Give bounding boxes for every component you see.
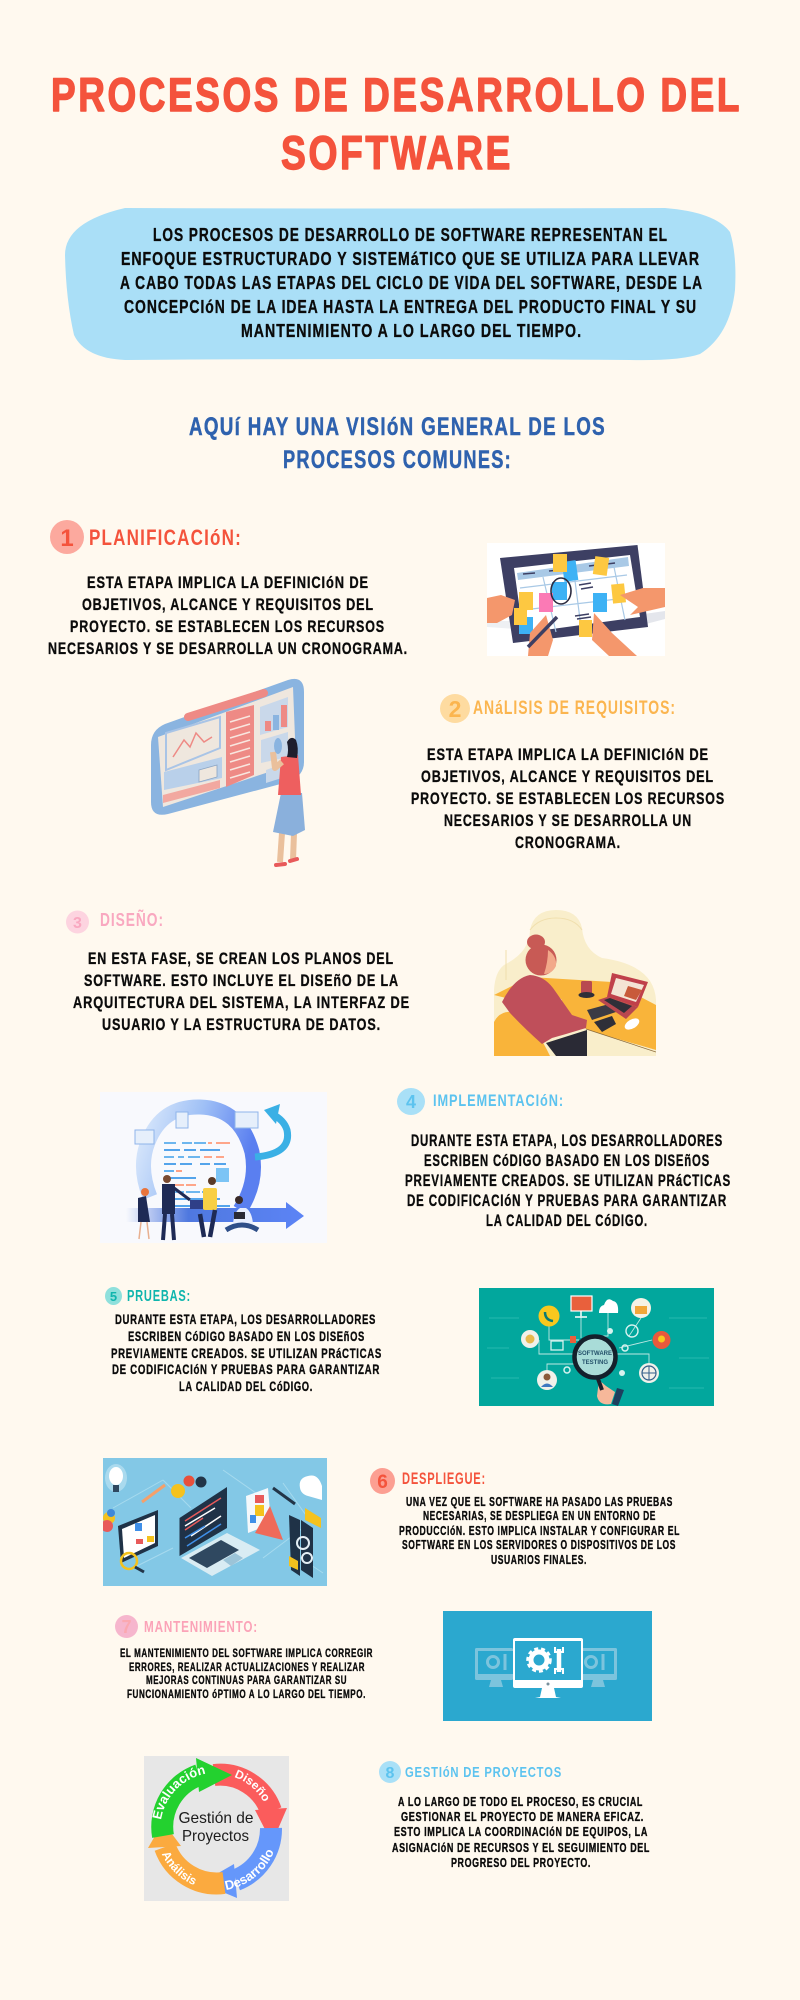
heading: diseño: DISEÑO:: [100, 909, 164, 930]
panel: step 2 análisis de requisitos: [151, 679, 725, 865]
text: despliegue: NECESARIAS, SE DESPLIEGA EN UN ENTORNO DE: [423, 1509, 656, 1523]
text: mantenimiento: MEJORAS CONTINUAS PARA GARANTIZAR SU: [146, 1675, 347, 1687]
text: pruebas: [111, 1311, 382, 1394]
heading: pruebas: PRUEBAS:: [127, 1288, 191, 1305]
text: mantenimiento: EL MANTENIMIENTO DEL SOFTWARE IMPLICA CORREGIR: [120, 1648, 373, 1660]
illustration: laptop and devices: [103, 1458, 327, 1586]
text: diseño: [73, 949, 410, 1034]
badge 8: [379, 1761, 401, 1783]
illustration: team in development cycle: [100, 1092, 327, 1243]
heading: análisis de requisitos: ANáLISIS DE REQUISITOS:: [473, 698, 676, 719]
subheading: AQUí HAY UNA VISIóN GENERAL DE LOS: [189, 413, 606, 441]
badge 2: [440, 694, 470, 723]
text: mantenimiento: [120, 1648, 373, 1701]
panel: introduction: [65, 208, 735, 360]
text: gestión de proyectos: ESTO IMPLICA LA COORDINACIóN DE EQUIPOS, LA: [394, 1825, 648, 1839]
illustration: monitors with gear and wrench: [443, 1611, 652, 1721]
subheading: PROCESOS COMUNES:: [283, 446, 512, 474]
text: gestión de proyectos: ASIGNACIóN DE RECURSOS Y EL SEGUIMIENTO DEL: [392, 1841, 650, 1855]
panel: introduction: MANTENIMIENTO A LO LARGO DEL TIEMPO.: [241, 321, 582, 341]
text: despliegue: [399, 1495, 680, 1567]
title: [51, 68, 742, 179]
title: SOFTWARE: [281, 126, 513, 179]
text: diseño: EN ESTA FASE, SE CREAN LOS PLANOS DEL: [88, 949, 394, 968]
text: diseño: SOFTWARE. ESTO INCLUYE EL DISEñO DE LA: [84, 971, 399, 990]
illustration: software testing: TESTING: [582, 1360, 608, 1366]
text: análisis: ESTA ETAPA IMPLICA LA DEFINICIóN DE: [427, 745, 709, 764]
badge 3: [66, 910, 89, 934]
text: análisis: CRONOGRAMA.: [515, 833, 621, 852]
badge 1: 1: [60, 525, 74, 552]
panel: step 7 mantenimiento: [115, 1611, 652, 1721]
panel: step 8 gestión de proyectos: [144, 1756, 650, 1901]
panel: step 1 planificación: [48, 520, 665, 658]
text: implementación: [405, 1131, 731, 1230]
text: planificación: NECESARIOS Y SE DESARROLLA UN CRONOGRAMA.: [48, 639, 408, 658]
panel: step 5 pruebas: [105, 1287, 714, 1406]
heading: planificación: PLANIFICACIóN:: [89, 525, 242, 550]
badge 7: [115, 1615, 138, 1638]
text: diseño: ARQUITECTURA DEL SISTEMA, LA INTERFAZ DE: [73, 993, 410, 1012]
text: despliegue: USUARIOS FINALES.: [491, 1553, 587, 1567]
badge 3: 3: [73, 915, 82, 932]
badge 2: 2: [449, 696, 461, 722]
illustration: woman at dashboard board: [151, 679, 305, 865]
heading: despliegue: DESPLIEGUE:: [402, 1469, 486, 1488]
text: diseño: USUARIO Y LA ESTRUCTURA DE DATOS.: [102, 1015, 381, 1034]
illustration: project management cycle: Desarrollo: [224, 1850, 273, 1890]
text: mantenimiento: FUNCIONAMIENTO óPTIMO A LO LARGO DEL TIEMPO.: [127, 1689, 366, 1701]
panel: step 6 despliegue: [101, 1458, 680, 1586]
illustration: software testing: SOFTWARE: [578, 1351, 612, 1357]
badge 4: 4: [406, 1092, 416, 1112]
illustration: project management cycle: [144, 1756, 289, 1901]
text: planificación: OBJETIVOS, ALCANCE Y REQUISITOS DEL: [82, 595, 374, 614]
text: planificación: ESTA ETAPA IMPLICA LA DEFINICIóN DE: [87, 573, 369, 592]
text: pruebas: DE CODIFICACIóN Y PRUEBAS PARA GARANTIZAR: [112, 1361, 380, 1377]
text: planificación: PROYECTO. SE ESTABLECEN LOS RECURSOS: [70, 617, 385, 636]
panel: step 4 implementación: [100, 1088, 731, 1243]
text: pruebas: PREVIAMENTE CREADOS. SE UTILIZAN PRáCTICAS: [111, 1345, 382, 1361]
badge 4: [397, 1088, 425, 1115]
badge 1: [50, 520, 84, 554]
text: gestión de proyectos: GESTIONAR EL PROYECTO DE MANERA EFICAZ.: [401, 1810, 644, 1824]
illustration: designer at desk: [494, 910, 656, 1056]
illustration: project management cycle: Evaluación: [152, 1767, 206, 1820]
text: pruebas: LA CALIDAD DEL CóDIGO.: [179, 1378, 313, 1394]
text: despliegue: UNA VEZ QUE EL SOFTWARE HA PASADO LAS PRUEBAS: [406, 1495, 673, 1509]
text: gestión de proyectos: A LO LARGO DE TODO EL PROCESO, ES CRUCIAL: [398, 1795, 643, 1809]
panel: step 3 diseño: [66, 909, 656, 1056]
subheading: [189, 413, 606, 474]
badge 6: 6: [377, 1472, 388, 1493]
badge 6: [370, 1468, 395, 1494]
badge 7: 7: [121, 1617, 132, 1637]
badge 5: 5: [110, 1289, 117, 1304]
illustration: project management cycle: Gestión de: [178, 1810, 254, 1827]
text: planificación: [48, 573, 408, 658]
badge 8: 8: [386, 1765, 395, 1782]
text: implementación: LA CALIDAD DEL CóDIGO.: [486, 1211, 648, 1230]
illustration: project management cycle: Diseño: [234, 1770, 268, 1801]
text: pruebas: DURANTE ESTA ETAPA, LOS DESARROLLADORES: [115, 1311, 376, 1327]
text: gestión de proyectos: PROGRESO DEL PROYECTO.: [451, 1856, 591, 1870]
text: despliegue: SOFTWARE EN LOS SERVIDORES O DISPOSITIVOS DE LOS: [402, 1538, 676, 1552]
heading: implementación: IMPLEMENTACIóN:: [433, 1091, 564, 1110]
illustration: software testing: [479, 1288, 714, 1406]
text: gestión de proyectos: [392, 1795, 650, 1870]
heading: gestión de proyectos: GESTIóN DE PROYECTOS: [405, 1764, 562, 1781]
text: despliegue: PRODUCCIóN. ESTO IMPLICA INSTALAR Y CONFIGURAR EL: [399, 1524, 680, 1538]
illustration: project management cycle: Análisis: [162, 1852, 196, 1884]
badge 5: [105, 1287, 122, 1305]
text: análisis: NECESARIOS Y SE DESARROLLA UN: [444, 811, 692, 830]
heading: mantenimiento: MANTENIMIENTO:: [144, 1619, 258, 1636]
illustration: project management cycle: Proyectos: [182, 1828, 249, 1845]
text: análisis: [411, 745, 725, 852]
text: mantenimiento: ERRORES, REALIZAR ACTUALIZACIONES Y REALIZAR: [129, 1662, 365, 1674]
illustration: tablet with sticky notes: [487, 543, 665, 656]
text: pruebas: ESCRIBEN CóDIGO BASADO EN LOS DISEñOS: [128, 1328, 365, 1344]
